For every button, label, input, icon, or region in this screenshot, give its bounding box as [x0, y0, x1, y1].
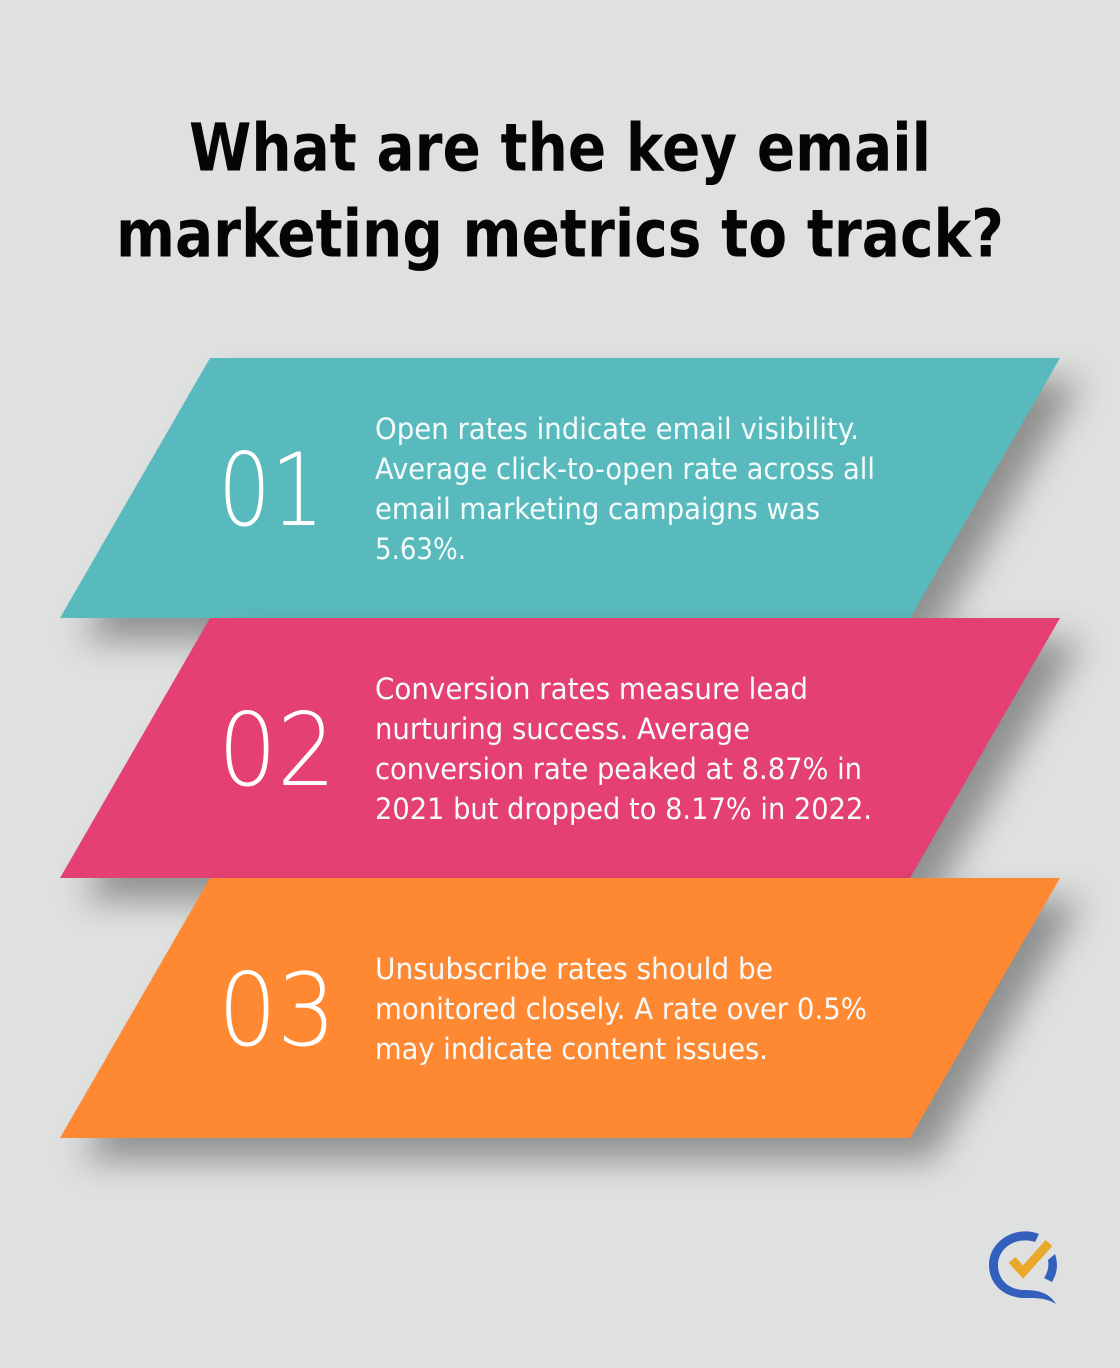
- text: open rates: [375, 412, 875, 566]
- title: What are the key email: [189, 110, 931, 186]
- text: open rates: email marketing campaigns was: [375, 492, 820, 526]
- icon: logo: [989, 1231, 1057, 1304]
- text: conversion rates: Conversion rates measure lead: [375, 672, 808, 706]
- text: unsubscribe rates: [375, 952, 867, 1066]
- number 02: 02: [218, 691, 336, 809]
- panel: unsubscribe rates: [60, 878, 1082, 1160]
- text: conversion rates: nurturing success. Average: [375, 712, 750, 746]
- panel: open rates: [60, 358, 1082, 640]
- text: open rates: Open rates indicate email visibility.: [375, 412, 859, 446]
- number 03: 03: [218, 951, 336, 1069]
- panel: conversion rates: [60, 618, 1082, 900]
- text: conversion rates: conversion rate peaked at 8.87% in: [375, 752, 862, 786]
- text: unsubscribe rates: may indicate content issues.: [375, 1032, 768, 1066]
- title: [116, 110, 1004, 272]
- text: conversion rates: [375, 672, 872, 826]
- text: unsubscribe rates: monitored closely. A rate over 0.5%: [375, 992, 867, 1026]
- text: unsubscribe rates: Unsubscribe rates should be: [375, 952, 773, 986]
- number 01: 01: [218, 431, 324, 549]
- text: open rates: Average click-to-open rate across all: [375, 452, 875, 486]
- text: conversion rates: 2021 but dropped to 8.17% in 2022.: [375, 792, 872, 826]
- text: open rates: 5.63%.: [375, 532, 466, 566]
